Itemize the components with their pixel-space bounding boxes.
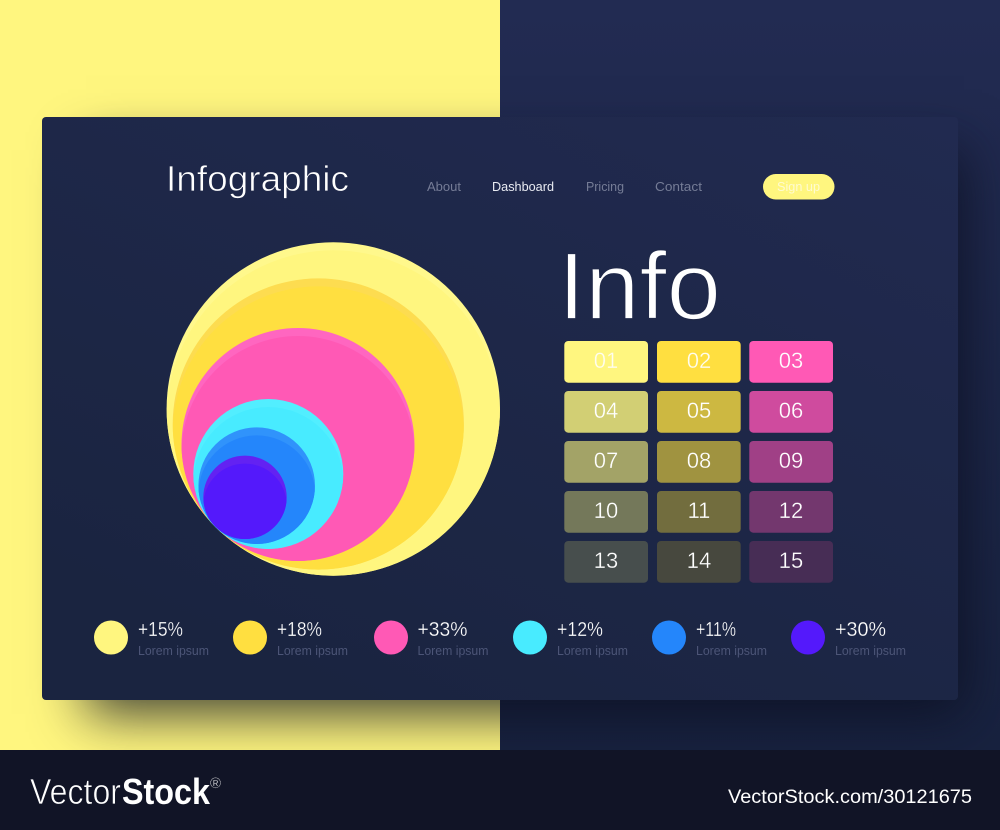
foreground artwork — [30, 117, 972, 804]
cell 01 — [564, 341, 648, 383]
legend item +12%: Lorem ipsum — [557, 644, 628, 658]
cell 07 — [564, 441, 648, 483]
legend item +33%: +33% — [418, 619, 468, 641]
nav item: Pricing: Pricing — [586, 179, 624, 194]
legend item +30%: Lorem ipsum — [835, 644, 906, 658]
cell 01: 01 — [594, 348, 618, 373]
cell 03 — [749, 341, 833, 383]
sign up button — [763, 174, 834, 200]
navigation menu — [427, 179, 702, 194]
background: yellow panel — [0, 0, 500, 750]
cell 11 — [657, 491, 741, 533]
legend item +12% — [513, 619, 628, 658]
footer logo: Stock — [122, 771, 211, 812]
cell 11: 11 — [688, 498, 710, 523]
footer logo: Vector — [30, 771, 121, 812]
circle: +33% pink — [176, 322, 420, 569]
cell 12 — [749, 491, 833, 533]
cell 09: 09 — [779, 448, 803, 473]
cell 06 — [749, 391, 833, 433]
nav item: Contact: Contact — [655, 179, 702, 194]
cell 04 — [564, 391, 648, 433]
nav item: About: About — [427, 179, 461, 194]
title: Infographic — [166, 158, 349, 199]
cell 07: 07 — [594, 448, 618, 473]
legend item +11% — [652, 619, 767, 658]
legend item +12%: +12% — [557, 619, 603, 641]
legend item +11%: +11% — [696, 619, 736, 641]
legend item +18% — [233, 619, 348, 658]
circle: +30% violet — [203, 456, 287, 539]
nav item: Dashboard: Dashboard — [492, 179, 554, 194]
cell 14: 14 — [687, 548, 711, 573]
sign up button: Sign up — [777, 179, 820, 194]
cell 05: 05 — [687, 398, 711, 423]
heading: Info: Info — [558, 233, 721, 340]
cell 13: 13 — [594, 548, 618, 573]
circle: +15% light yellow — [160, 236, 506, 584]
legend item +33% — [374, 619, 488, 658]
cell 02 — [657, 341, 741, 383]
cell 10: 10 — [594, 498, 618, 523]
background: navy panel — [500, 0, 1000, 750]
circle: +11% blue — [198, 427, 315, 544]
legend item +30%: +30% — [835, 619, 886, 641]
legend item +33%: Lorem ipsum — [418, 644, 488, 658]
cell 09 — [749, 441, 833, 483]
footer logo — [30, 771, 221, 812]
cell 05 — [657, 391, 741, 433]
legend item +15%: Lorem ipsum — [138, 644, 209, 658]
panel: main card — [42, 117, 958, 700]
circle: +12% cyan — [193, 399, 344, 549]
circle: +18% yellow — [166, 272, 470, 578]
cell 04: 04 — [594, 398, 618, 423]
legend — [94, 619, 906, 658]
footer logo: ® — [210, 775, 221, 792]
cell 10 — [564, 491, 648, 533]
legend item +18%: +18% — [277, 619, 322, 641]
nested circle chart — [160, 236, 506, 584]
cell 03: 03 — [779, 348, 803, 373]
legend item +18%: Lorem ipsum — [277, 644, 348, 658]
legend item +15%: +15% — [138, 619, 183, 641]
cell 12: 12 — [779, 498, 803, 523]
cell 15 — [749, 541, 833, 583]
cell 08: 08 — [687, 448, 711, 473]
footer stock id: VectorStock.com/30121675 — [728, 787, 972, 808]
cell 13 — [564, 541, 648, 583]
cell 06: 06 — [779, 398, 803, 423]
cell 08 — [657, 441, 741, 483]
legend item +15% — [94, 619, 209, 658]
cell 02: 02 — [687, 348, 711, 373]
numbered colour grid — [564, 341, 833, 583]
legend item +30% — [791, 619, 906, 658]
legend item +11%: Lorem ipsum — [696, 644, 767, 658]
cell 15: 15 — [779, 548, 803, 573]
cell 14 — [657, 541, 741, 583]
